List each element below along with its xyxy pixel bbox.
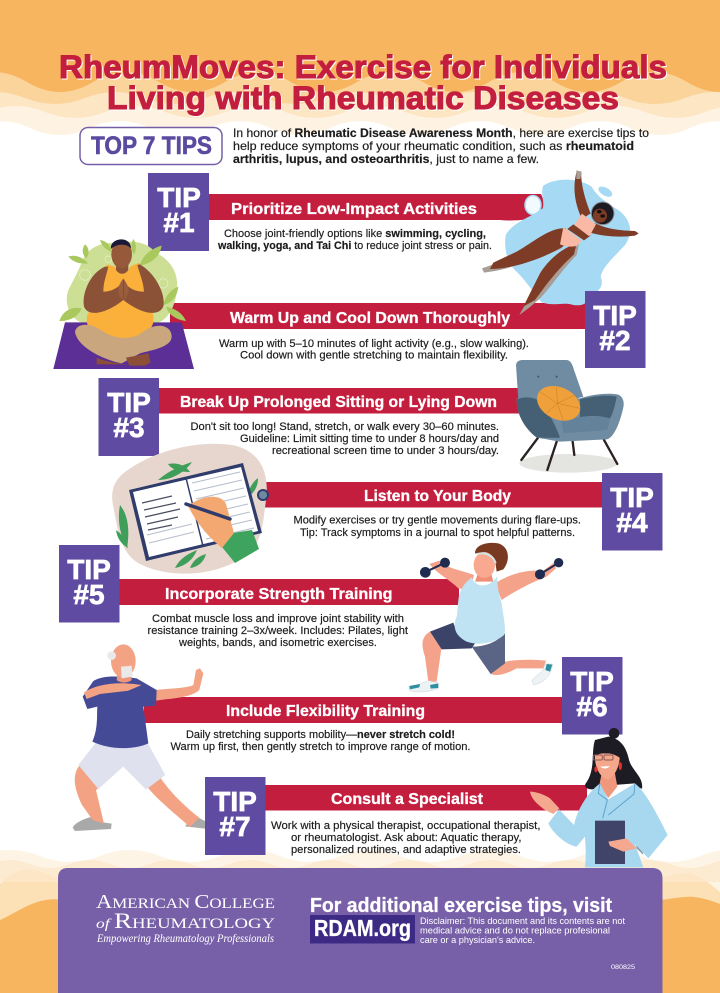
tip 6 badge: TIP: [570, 666, 614, 697]
footer logo: American College of Rheumatology: Empowering Rheumatology Professionals: [96, 931, 274, 945]
tip 3 badge: TIP: [107, 387, 151, 418]
footer disclaimer: medical advice and do not replace profesional: [420, 926, 610, 936]
tip 3 badge: [98, 378, 159, 456]
tip 4 banner: Listen to Your Body: [364, 488, 511, 505]
tip 5 text: Combat muscle loss and improve joint stability with: [152, 613, 404, 625]
tip 3 text: recreational screen time to under 3 hours/day.: [272, 445, 499, 457]
intro text: help reduce symptoms of your rheumatic condition, such as rheumatoid: [233, 139, 634, 153]
tip 4 text: Modify exercises or try gentle movements during flare-ups.: [294, 514, 581, 526]
tip 7 banner: [265, 785, 587, 810]
badge: top 7 tips: [80, 128, 222, 164]
tip 3 text: Guideline: Limit sitting time to under 8 hours/day and: [240, 433, 499, 445]
tip 1 banner: Prioritize Low-Impact Activities: [231, 201, 477, 218]
footer link box: RDAM.org: [314, 915, 411, 941]
tip 5 text: [148, 613, 409, 649]
tip 3 text: [190, 421, 499, 457]
tip 7 badge: #7: [219, 811, 251, 842]
tip 6 badge: [562, 657, 622, 734]
tip 5 badge: #5: [73, 579, 105, 610]
illustration: armchair: [516, 360, 624, 473]
tip 7 badge: TIP: [213, 786, 257, 817]
tip 4 badge: TIP: [610, 482, 654, 513]
tip 2 banner: [170, 303, 586, 329]
illustration: swimmer in water: [482, 170, 639, 315]
tip 4 banner: [264, 482, 603, 508]
tip 2 badge: TIP: [593, 300, 637, 331]
tip 5 text: weights, bands, and isometric exercises.: [178, 637, 377, 649]
title: RheumMoves: Exercise for Individuals: [59, 49, 667, 85]
illustration: woman lunging with dumbbells: [409, 543, 563, 692]
illustration: journal and writing hand: [112, 444, 268, 574]
footer panel: [58, 868, 662, 993]
footer disclaimer: care or a physician's advice.: [420, 935, 535, 946]
tip 2 text: Warm up with 5–10 minutes of light activity (e.g., slow walking).: [219, 338, 529, 350]
tip 1 badge: [148, 173, 209, 251]
tip 5 badge: [59, 545, 120, 622]
tip 4 text: Tip: Track symptoms in a journal to spot helpful patterns.: [300, 527, 575, 539]
tip 6 text: Warm up first, then gently stretch to improve range of motion.: [170, 741, 470, 753]
tip 5 banner: Incorporate Strength Training: [165, 586, 392, 603]
illustration: specialist doctor with clipboard: [530, 728, 668, 867]
tip 2 text: Cool down with gentle stretching to maintain flexibility.: [240, 350, 508, 362]
tip 2 badge: [585, 291, 646, 368]
footer call to action: For additional exercise tips, visit: [310, 895, 612, 917]
tip 6 banner: Include Flexibility Training: [226, 703, 425, 720]
footer logo: American College of Rheumatology: [96, 891, 275, 945]
tip 1 badge: #1: [163, 207, 195, 238]
tip 7 text: or rheumatologist. Ask about: Aquatic therapy,: [291, 832, 522, 844]
tip 5 badge: TIP: [67, 554, 111, 585]
tip 7 text: Work with a physical therapist, occupational therapist,: [271, 820, 540, 832]
footer logo: American College of Rheumatology: of RHEUMATOLOGY: [96, 908, 275, 933]
tip 6 text: Daily stretching supports mobility—never stretch cold!: [186, 729, 455, 741]
illustration: person meditating on mat: [53, 239, 194, 369]
intro text: In honor of Rheumatic Disease Awareness Month, here are exercise tips to: [233, 126, 649, 140]
intro text: [233, 126, 649, 166]
tip 6 banner: [144, 697, 563, 723]
tip 1 text: Choose joint-friendly options like swimming, cycling,: [224, 228, 486, 240]
tip 1 banner: [209, 194, 545, 220]
footer disclaimer: [420, 916, 625, 946]
tip 7 text: personalized routines, and adaptive strategies.: [291, 844, 521, 856]
tip 6 badge: #6: [576, 691, 608, 722]
tip 6 text: [170, 729, 470, 753]
tip 5 banner: [119, 579, 459, 605]
tip 1 text: [217, 228, 492, 252]
tip 7 badge: [205, 777, 266, 855]
intro text: arthritis, lupus, and osteoarthritis , just to name a few.: [233, 152, 539, 166]
tip 4 badge: #4: [616, 507, 648, 538]
tip 2 banner: Warm Up and Cool Down Thoroughly: [230, 310, 510, 327]
tip 3 banner: Break Up Prolonged Sitting or Lying Down: [180, 394, 497, 411]
tip 4 text: [294, 514, 581, 539]
title: [59, 49, 667, 116]
footer disclaimer: Disclaimer: This document and its contents are not: [420, 916, 625, 927]
title: Living with Rheumatic Diseases: [107, 80, 619, 116]
tip 3 badge: #3: [113, 412, 145, 443]
badge: top 7 tips: TOP 7 TIPS: [91, 132, 212, 160]
tip 2 text: [219, 338, 529, 362]
tip 7 banner: Consult a Specialist: [331, 791, 484, 808]
tip 2 badge: #2: [599, 325, 631, 356]
footer logo: American College of Rheumatology: AMERICAN COLLEGE: [96, 891, 275, 913]
tip 5 text: resistance training 2–3x/week. Includes: Pilates, light: [148, 625, 409, 637]
tip 7 text: [271, 820, 540, 856]
tip 1 text: walking, yoga, and Tai Chi to reduce joint stress or pain.: [217, 240, 492, 252]
illustration: older man doing tai chi: [73, 644, 212, 831]
tip 4 badge: [602, 473, 662, 550]
tip 3 banner: [159, 388, 519, 414]
tip 1 badge: TIP: [157, 182, 201, 213]
tip 3 text: Don't sit too long! Stand, stretch, or walk every 30–60 minutes.: [190, 421, 499, 433]
footer code: 080825: [611, 964, 635, 971]
